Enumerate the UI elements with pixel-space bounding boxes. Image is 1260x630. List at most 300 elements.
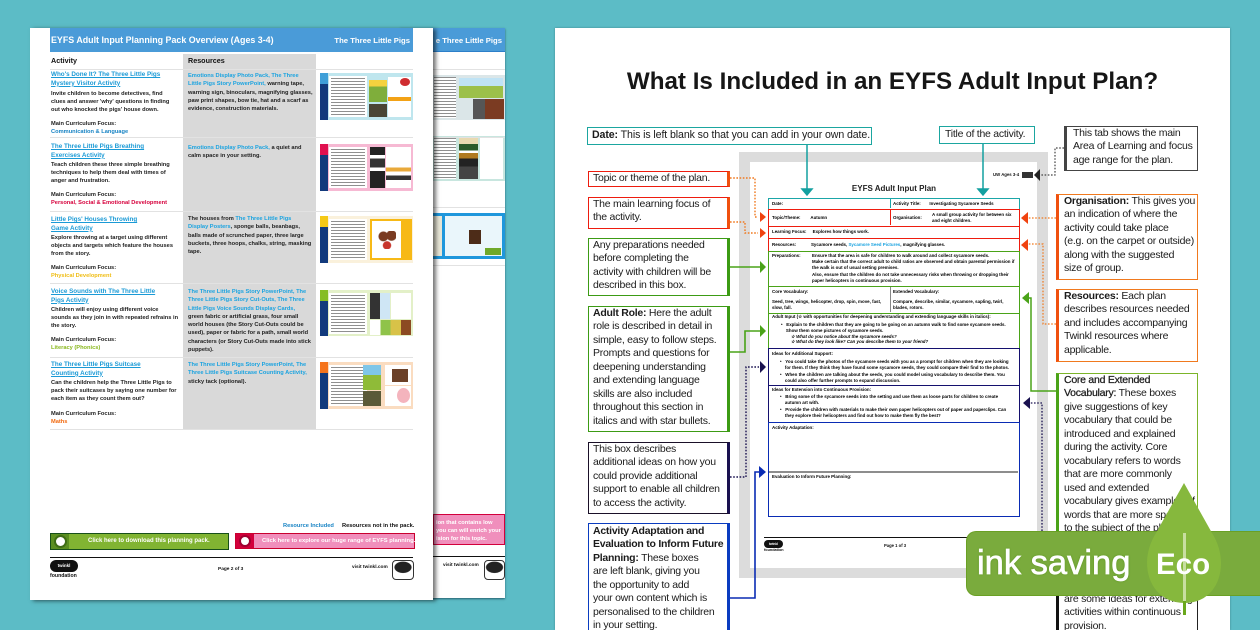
row 2 thumbnail bbox=[320, 144, 413, 191]
arrow: organisation bbox=[1021, 212, 1056, 224]
page heading: EYFS Adult Input Planning Pack Overview (Ages 3-4) bbox=[51, 35, 274, 45]
row 3 resources: balls made of scrunched paper, three large bbox=[188, 232, 304, 238]
text: Ensure that the area is safe for children to walk around and collect sycamore seeds. bbox=[812, 253, 989, 258]
plan sheet bbox=[329, 76, 367, 117]
arrow: additional support bbox=[730, 361, 766, 477]
arrow: title to plan bbox=[978, 144, 988, 195]
callout: additional support: support to enable all children bbox=[593, 483, 720, 495]
plan row: vocabulary bbox=[768, 286, 1020, 314]
pink button bbox=[235, 533, 415, 549]
activity description: each item as they count them out? bbox=[51, 396, 145, 402]
focus value: Literacy (Phonics) bbox=[51, 345, 100, 351]
focus value: Personal, Social & Emotional Development bbox=[51, 200, 167, 206]
split bbox=[890, 199, 891, 208]
activity description: objects and targets which feature the houses bbox=[51, 243, 173, 249]
callout: learning focus bbox=[588, 197, 730, 229]
row 5 resources bbox=[188, 362, 307, 384]
row 4 resources: characters (or Story Cut-Outs made into stick bbox=[188, 338, 311, 344]
callout: area of learning tab: Area of Learning and focus bbox=[1073, 140, 1193, 152]
cards bbox=[386, 147, 411, 188]
arrow: adult role bbox=[730, 325, 766, 352]
navy strip bbox=[320, 216, 328, 263]
white panel left bbox=[433, 216, 442, 256]
picture: hillside bbox=[459, 78, 503, 98]
callout: resources bbox=[1056, 289, 1198, 362]
activity description: Children will enjoy using different voice bbox=[51, 307, 158, 313]
panel: front overview page bbox=[30, 28, 433, 600]
plan sheet bbox=[329, 219, 367, 260]
row 4 resources: used), paper or fabric for a path, small world bbox=[188, 330, 308, 336]
plan age tab bbox=[993, 172, 1033, 178]
panel: back overview page bbox=[400, 28, 505, 598]
back page footer rule bbox=[433, 556, 505, 557]
row 4 resources: puppets). bbox=[188, 347, 214, 353]
activity title: The Three Little Pigs Suitcase bbox=[51, 361, 141, 368]
plan row: adult input bbox=[768, 313, 1020, 349]
activity description: Can the children help the Three Little Pigs to bbox=[51, 380, 172, 386]
plan sheet bbox=[329, 365, 367, 406]
arrow: topic bbox=[730, 178, 766, 222]
pigs bbox=[378, 231, 396, 249]
row 3 resources bbox=[188, 216, 311, 255]
plan row: resources bbox=[768, 238, 1020, 252]
callout: learning focus: the activity. bbox=[593, 211, 642, 223]
callout: organisation: Organisation: This gives you bbox=[1064, 195, 1195, 207]
plan footer page number: Page 1 of 3 bbox=[884, 543, 906, 548]
row 3 thumbnail bbox=[320, 216, 413, 263]
callout: resources: applicable. bbox=[1064, 344, 1111, 356]
activity title bbox=[51, 216, 138, 232]
split bbox=[890, 210, 891, 225]
row 5 resources: sticky tack (optional). bbox=[188, 378, 246, 384]
organisation text: and eight children. bbox=[932, 218, 971, 223]
badge: ink saving eco bbox=[966, 483, 1260, 615]
badge label: ink saving: ink saving bbox=[977, 544, 1130, 582]
callout: core and extended vocabulary: vocabulary gives examples of bbox=[1064, 495, 1195, 507]
callout: core and extended vocabulary: Core and Extended bbox=[1064, 374, 1150, 386]
button icon panel bbox=[236, 534, 254, 548]
callout: organisation bbox=[1056, 194, 1198, 280]
callout: adult role: italics and with star bullets. bbox=[593, 415, 710, 427]
activity title: Mystery Visitor Activity bbox=[51, 80, 120, 87]
back page row line 1 bbox=[433, 69, 505, 70]
activity title: Little Pigs' Houses Throwing bbox=[51, 216, 137, 223]
back page row line 2 bbox=[433, 137, 505, 138]
callout: adult role: and extending language bbox=[593, 374, 700, 386]
callout: date: Date: This is left blank so that you can add in your own date. bbox=[592, 129, 870, 141]
callout: adult role: throughout this section in bbox=[593, 401, 703, 413]
callout: core and extended vocabulary: that are more commonly bbox=[1064, 468, 1172, 480]
callout: additional support: additional ideas on how you bbox=[593, 456, 716, 468]
arrow: resources bbox=[1021, 239, 1056, 324]
tag bbox=[320, 144, 328, 155]
page number: Page 2 of 3 bbox=[218, 567, 243, 572]
callout: adaptation and evaluation bbox=[588, 523, 730, 630]
callout: adaptation and evaluation: Activity Adaptation and bbox=[593, 525, 704, 537]
callout: organisation: activity could take place bbox=[1064, 222, 1169, 234]
extended: Extended Vocabulary: Compare, describe, similar, sycamore, sapling, twirl, bbox=[893, 289, 1004, 304]
focus value: Maths bbox=[51, 419, 67, 425]
activity title bbox=[51, 361, 141, 377]
callout: adaptation and evaluation: the opportunity to add bbox=[593, 579, 689, 591]
focus label: Main Curriculum Focus: bbox=[51, 192, 116, 198]
bullets: • Bring some of the sycamore seeds into the setting and use them as loose parts for children to create bbox=[780, 394, 998, 399]
extended: blades, rotors. bbox=[893, 305, 924, 310]
label: Preparations: bbox=[772, 253, 801, 258]
key: resource included: Resource Included bbox=[283, 523, 334, 529]
bullets: could also offer further prompts to expand discussion. bbox=[785, 378, 900, 383]
activity title bbox=[51, 288, 156, 304]
core: Core Vocabulary: Seed, tree, wings, helicopter, drop, spin, move, fast, bbox=[772, 289, 881, 304]
activity description bbox=[51, 162, 170, 184]
back page row line 4 bbox=[433, 265, 505, 266]
callout: preparations: described in this box. bbox=[593, 279, 686, 291]
activity description bbox=[51, 380, 176, 402]
text: paper helicopters in continuous provision. bbox=[812, 278, 902, 283]
callout: area of learning tab: age range for the plan. bbox=[1073, 154, 1173, 166]
row rule 4 bbox=[50, 283, 413, 284]
green button bbox=[50, 533, 229, 550]
callout: adaptation and evaluation: Evaluation to Inform Future bbox=[593, 538, 723, 550]
activity description bbox=[51, 307, 178, 329]
heading: Adult Input (☆ with opportunities for deepening understanding and extending language skills in italics): bbox=[772, 314, 991, 319]
callout: core and extended vocabulary: used and extended bbox=[1064, 482, 1149, 494]
bullets: • You could take the photos of the sycamore seeds with you as a prompt for children when they are looking bbox=[780, 359, 1009, 364]
row 4 resources: green fabric or artificial grass, four small bbox=[188, 314, 298, 320]
callout: resources: Twinkl resources where bbox=[1064, 330, 1168, 342]
callout: title of the activity: Title of the activity. bbox=[945, 128, 1025, 140]
split bbox=[890, 287, 891, 312]
row rule 2 bbox=[50, 137, 413, 138]
row 1 resources: Emotions Display Photo Pack, The Three bbox=[188, 73, 299, 79]
back page badge bbox=[484, 560, 505, 580]
poster stack bbox=[370, 219, 412, 260]
story picture bbox=[363, 365, 381, 390]
text bbox=[812, 253, 1014, 283]
plan row: additional support bbox=[768, 348, 1020, 386]
cut-outs bbox=[391, 293, 411, 319]
focus label: Main Curriculum Focus: bbox=[51, 121, 116, 127]
arrow: age tab bbox=[1034, 148, 1064, 181]
callout: area of learning tab bbox=[1064, 126, 1198, 171]
callout: core and extended vocabulary: Vocabulary: These boxes bbox=[1064, 387, 1176, 399]
callout: resources: Resources: Each plan bbox=[1064, 290, 1166, 302]
story cards bbox=[370, 293, 390, 319]
callout: additional support: to access the activity. bbox=[593, 497, 686, 509]
activity description: clues and answer 'why' questions in finding bbox=[51, 99, 169, 105]
plan row: topic and organisation bbox=[768, 209, 1020, 227]
callout: adaptation and evaluation: are left blank, giving you bbox=[593, 565, 700, 577]
row 5 resources: Three Little Pigs Suitcase Counting Activity, bbox=[188, 370, 307, 376]
evaluation label: Evaluation to Inform Future Planning: bbox=[772, 474, 851, 479]
callout: additional support: This box describes bbox=[593, 443, 676, 455]
callout: date bbox=[587, 127, 872, 145]
callout: topic: Topic or theme of the plan. bbox=[593, 172, 710, 184]
plan row: date and title bbox=[768, 198, 1020, 210]
back page row divider thumbnails bbox=[433, 75, 505, 259]
text: Learning Focus: Explores how things work. bbox=[772, 229, 869, 234]
logo cloud bbox=[764, 540, 783, 548]
callout: adaptation and evaluation: personalised to the children bbox=[593, 606, 714, 618]
heading: Ideas for Extension into Continuous Provision: bbox=[772, 387, 871, 392]
callout: title of the activity bbox=[939, 126, 1035, 144]
poster bbox=[372, 221, 401, 258]
callout: area of learning tab: This tab shows the main bbox=[1073, 127, 1180, 139]
back page header bar bbox=[433, 28, 505, 52]
heading: Ideas for Additional Support: bbox=[772, 351, 833, 356]
thumbnail: mystery visitor bbox=[433, 75, 505, 120]
plan age tab: UW Ages 3-4 bbox=[993, 172, 1019, 177]
logo cloud: twinkl bbox=[58, 563, 70, 568]
row 4 activity bbox=[51, 288, 178, 351]
row rule 1 bbox=[50, 69, 413, 70]
callout: organisation: an indication of where the bbox=[1064, 208, 1177, 220]
focus label: Main Curriculum Focus: bbox=[51, 337, 116, 343]
text: Make certain that the correct adult to child ratios are observed and obtain parental permission if bbox=[812, 259, 1014, 264]
green button bbox=[485, 248, 501, 255]
callout: organisation: (e.g. on the carpet or outside) bbox=[1064, 235, 1194, 247]
badge bar bbox=[966, 531, 1260, 596]
suitcase sheet bbox=[385, 365, 411, 385]
row 4 resources: Little Pigs Voice Sounds Display Cards, bbox=[188, 306, 295, 312]
picture: sign bbox=[485, 99, 504, 119]
callout: extension ideas: activities within continuous bbox=[1064, 606, 1181, 618]
callout: preparations: Any preparations needed bbox=[593, 239, 705, 251]
back page pink callout: you can will enrich your bbox=[436, 528, 501, 534]
focus value: Physical Development bbox=[51, 273, 111, 279]
callout: core and extended vocabulary bbox=[1056, 373, 1198, 543]
key: resources not in pack: Resources not in the pack. bbox=[342, 523, 414, 529]
cards bbox=[388, 77, 411, 117]
callout: additional support: could provide additional bbox=[593, 470, 697, 482]
bullets: ☆ What do you notice about the sycamore seeds? bbox=[791, 334, 897, 339]
topic name: The Three Little Pigs bbox=[334, 36, 410, 45]
row 3 resources: buckets, three hoops, chalks, string, masking bbox=[188, 241, 311, 247]
bullets: ☆ What do they look like? Can you describe them to your friend? bbox=[791, 339, 928, 344]
row 2 resources: Emotions Display Photo Pack, a quiet and bbox=[188, 145, 301, 151]
bullets bbox=[781, 322, 1006, 344]
row 4 resources: Three Little Pigs Story Cut-Outs, The Three bbox=[188, 297, 305, 303]
bullets: for them. If they think they have found some sycamore seeds, they could compare their find to the photos. • When the children are talking about the seeds, you could model using vocabulary to describe them. You bbox=[780, 365, 1009, 377]
callout: adaptation and evaluation: Planning: These boxes bbox=[593, 552, 698, 564]
callout: adult role: role is described in detail in bbox=[593, 320, 712, 332]
activity description bbox=[51, 91, 169, 113]
pink button: Click here to explore our huge range of EYFS planning. bbox=[262, 538, 415, 544]
column heading: activity: Activity bbox=[51, 56, 77, 65]
navy strip bbox=[320, 362, 328, 409]
badge bbox=[392, 560, 414, 580]
organisation text: A small group activity for between six bbox=[932, 212, 1012, 217]
organisation text bbox=[932, 212, 1012, 223]
callout: adult role: skills are also included bbox=[593, 388, 692, 400]
panel: plan document frame bbox=[739, 152, 1048, 578]
thumbnail: mint display bbox=[433, 136, 505, 181]
row 4 resources bbox=[188, 289, 311, 353]
callout: core and extended vocabulary: during the activity. Core bbox=[1064, 441, 1167, 453]
row 3 resources: Display Posters, sponge balls, beanbags, bbox=[188, 224, 300, 230]
text: Resources: Sycamore seeds, Sycamore Seed Pictures, magnifying glasses. bbox=[772, 242, 945, 247]
tab chip bbox=[1022, 172, 1033, 178]
row 5 resources: The Three Little Pigs Story PowerPoint, The bbox=[188, 362, 306, 368]
back page pink callout bbox=[433, 514, 505, 545]
back page row line 3 bbox=[433, 207, 505, 208]
focus label: Main Curriculum Focus: bbox=[51, 411, 116, 417]
plan footer rule bbox=[764, 537, 1030, 538]
text: the walk is out of usual setting premises. Also, ensure that the children do not take unnecessary risks when throwing or dropping their bbox=[812, 265, 1009, 277]
bullets: they explore their helicopters and find out how to make them fly the best? bbox=[785, 413, 941, 418]
activity description: from the story. bbox=[51, 251, 90, 257]
adaptation label: Activity Adaptation: bbox=[772, 425, 814, 430]
activity title bbox=[51, 71, 160, 87]
row 1 resources bbox=[188, 73, 313, 112]
logo cloud bbox=[50, 560, 78, 572]
callout: preparations: before completing the bbox=[593, 252, 689, 264]
arrow: date to plan bbox=[802, 144, 812, 195]
activity title: Voice Sounds with The Three Little bbox=[51, 288, 155, 295]
callout: core and extended vocabulary: vocabulary refers to words bbox=[1064, 455, 1181, 467]
organisation: Organisation: bbox=[893, 215, 922, 220]
row 1 resources: warning sign, binoculars, magnifying glasses, bbox=[188, 90, 313, 96]
row 1 activity bbox=[51, 71, 169, 135]
back page visit text: visit twinkl.com bbox=[443, 563, 479, 568]
resources column shading bbox=[183, 54, 316, 429]
row 3 resources: The houses from The Three Little Pigs bbox=[188, 216, 291, 222]
row 2 resources bbox=[188, 145, 302, 159]
tag bbox=[320, 290, 328, 301]
callout: adaptation and evaluation: your own content which is bbox=[593, 592, 707, 604]
pig card bbox=[385, 386, 411, 406]
core: slow, fall. bbox=[772, 305, 792, 310]
title: Activity Title: Investigating Sycamore Seeds bbox=[893, 201, 994, 206]
arrow: vocabulary bbox=[1022, 292, 1056, 391]
back page pink callout: ion that contains low bbox=[436, 520, 493, 526]
thumbnail: learning mat bbox=[433, 213, 505, 259]
callout: adult role bbox=[588, 306, 730, 432]
bullets: • Explain to the children that they are going to be going on an autumn walk to find some sycamore seeds. bbox=[781, 322, 1006, 327]
row rule 3 bbox=[50, 211, 413, 212]
scene bbox=[370, 320, 411, 335]
pig bbox=[400, 78, 410, 86]
arrow: adaptation bbox=[730, 466, 766, 598]
divider bbox=[769, 471, 1018, 472]
callout: adult role: Prompts and questions for bbox=[593, 347, 709, 359]
arrow: learning focus bbox=[730, 222, 766, 238]
plan heading: EYFS Adult Input Plan bbox=[852, 184, 936, 193]
callout: core and extended vocabulary: give suggestions of key bbox=[1064, 401, 1167, 413]
row 1 resources: Little Pigs Story PowerPoint, warning tape, bbox=[188, 81, 304, 87]
row 4 resources: world houses (the Story Cut-Outs could be bbox=[188, 322, 304, 328]
activity title: Counting Activity bbox=[51, 370, 103, 377]
activity description: anger and frustration. bbox=[51, 178, 110, 184]
callout: adult role: Adult Role: Here the adult bbox=[593, 307, 711, 319]
logo: twinkl foundation bbox=[50, 560, 78, 579]
callout: resources: and includes accompanying bbox=[1064, 317, 1187, 329]
row 4 thumbnail bbox=[320, 290, 413, 336]
activity description: sounds as they join in with repeated refrains in bbox=[51, 315, 178, 321]
row 3 activity bbox=[51, 216, 173, 279]
badge label: eco: Eco bbox=[1156, 548, 1210, 581]
logo word: foundation bbox=[764, 548, 784, 552]
plan row: learning focus bbox=[768, 226, 1020, 239]
callout: resources: describes resources needed bbox=[1064, 303, 1189, 315]
header bar bbox=[50, 28, 413, 52]
focus label: Main Curriculum Focus: bbox=[51, 265, 116, 271]
focus value: Communication & Language bbox=[51, 129, 128, 135]
activity description: out who knocked the pigs' house down. bbox=[51, 107, 159, 113]
row 4 resources: The Three Little Pigs Story PowerPoint, The bbox=[188, 289, 306, 295]
activity description bbox=[51, 235, 173, 257]
activity title bbox=[51, 143, 144, 159]
callout: core and extended vocabulary: introduced and explained bbox=[1064, 428, 1175, 440]
picture: wolf bbox=[473, 99, 485, 119]
activity description: Explore throwing at a target using different bbox=[51, 235, 167, 241]
panel: adult input plan explainer page bbox=[555, 28, 1230, 630]
navy strip bbox=[320, 73, 328, 120]
topic: Topic/Theme: Autumn bbox=[772, 215, 827, 220]
plan sheet bbox=[329, 293, 367, 334]
house bbox=[469, 230, 481, 244]
tag bbox=[320, 216, 328, 227]
navy strip bbox=[320, 144, 328, 191]
callout: organisation: along with the suggested bbox=[1064, 249, 1174, 261]
callout: extension ideas bbox=[1056, 590, 1198, 630]
callout: preparations: activity with children will be bbox=[593, 266, 711, 278]
plan row: adaptation and evaluation bbox=[768, 422, 1020, 517]
bullets: autumn art with. • Provide the children with materials to make their own paper helicopters out of paper and paperclips. Can bbox=[780, 400, 1006, 412]
green button: Click here to download this planning pack. bbox=[88, 538, 210, 544]
callout: extension ideas: are some ideas for extending bbox=[1064, 593, 1192, 605]
callout: core and extended vocabulary: to the subject of the plan. bbox=[1064, 522, 1175, 534]
row rule 5 bbox=[50, 357, 413, 358]
title: What Is Included in an EYFS Adult Input Plan? bbox=[627, 68, 1158, 95]
bullets bbox=[780, 394, 1006, 418]
visit link: visit twinkl.com bbox=[352, 565, 388, 570]
activity description: the story. bbox=[51, 323, 76, 329]
callout: preparations bbox=[588, 238, 730, 296]
button icon bbox=[54, 535, 67, 548]
callout: adult role: deepening understanding bbox=[593, 361, 706, 373]
bullets: Show them some pictures of sycamore seeds. bbox=[786, 328, 883, 333]
picture strip bbox=[459, 138, 478, 179]
photo strip bbox=[370, 147, 385, 188]
button icon bbox=[239, 535, 251, 547]
callout: core and extended vocabulary: vocabulary that could be bbox=[1064, 414, 1172, 426]
sheet bbox=[434, 138, 456, 179]
activity description: pack their suitcases by saying one number for bbox=[51, 388, 176, 394]
row 5 activity bbox=[51, 361, 176, 425]
plan footer logo bbox=[764, 540, 784, 552]
picture bbox=[369, 80, 387, 102]
row 5 thumbnail bbox=[320, 362, 413, 409]
callout: core and extended vocabulary: words that are more specific bbox=[1064, 509, 1188, 521]
picture 2 bbox=[363, 391, 381, 406]
label: Date: bbox=[772, 201, 783, 206]
footer rule bbox=[50, 557, 413, 558]
badge drop bbox=[1147, 483, 1221, 615]
row 1 resources: paw print shapes, bow tie, hat and a scarf as bbox=[188, 98, 308, 104]
suitcase bbox=[392, 369, 408, 382]
activity description: Teach children these three simple breathing bbox=[51, 162, 170, 168]
row 2 resources: calm space in your setting. bbox=[188, 153, 261, 159]
row 2 activity bbox=[51, 143, 170, 206]
arrow: preparations bbox=[730, 261, 766, 273]
row rule 6 bbox=[50, 429, 413, 430]
picture 2 bbox=[369, 104, 387, 117]
callout: learning focus: The main learning focus of bbox=[593, 198, 710, 210]
navy strip bbox=[320, 290, 328, 337]
sheet bbox=[434, 77, 456, 118]
callout: topic bbox=[588, 171, 730, 187]
